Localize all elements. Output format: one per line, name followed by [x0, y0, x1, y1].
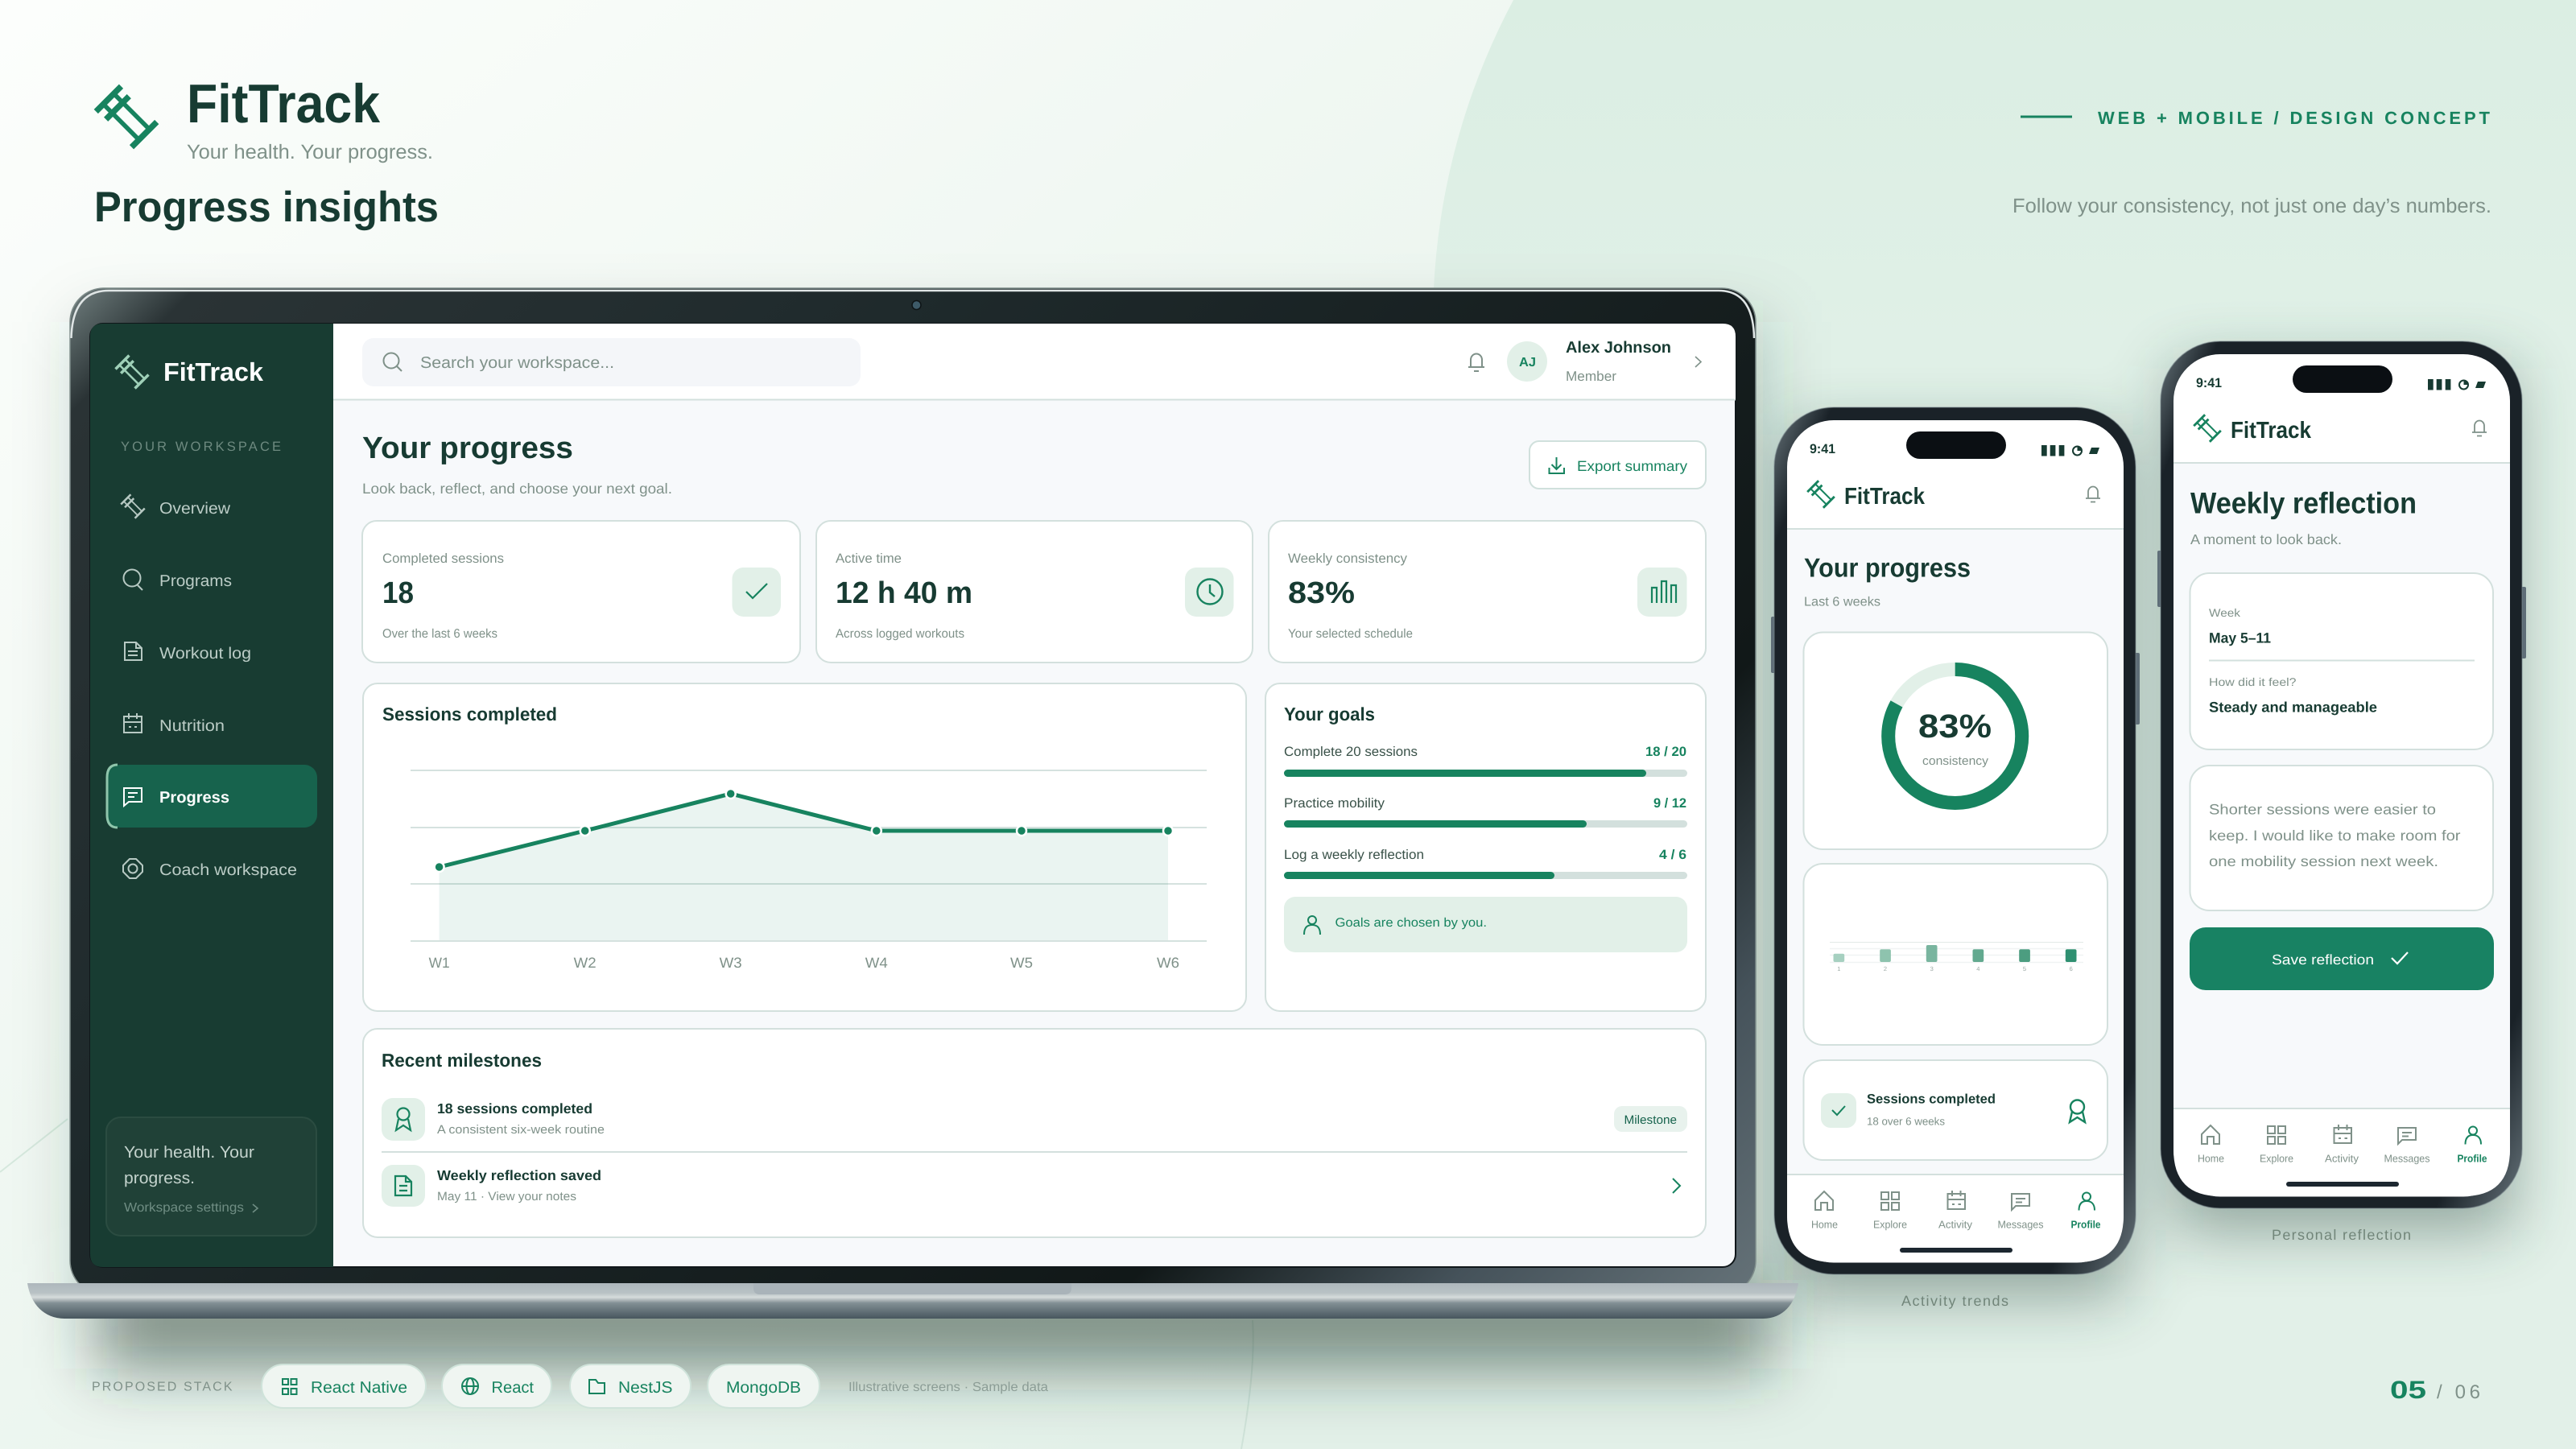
- user profile: Member: [1566, 369, 1616, 384]
- sidebar section label: YOUR WORKSPACE: [121, 440, 281, 454]
- bar chart card: 5: [2023, 965, 2026, 972]
- nav: overview: [121, 494, 231, 518]
- chip: React: React: [491, 1379, 534, 1397]
- goal: practice mobility: [1284, 796, 1687, 828]
- sessions summary card: 18 over 6 weeks: [1867, 1116, 1945, 1127]
- bar chart card: [1803, 864, 2107, 1045]
- reflection note card: Shorter sessions were easier to: [2209, 802, 2436, 818]
- header: concept tag: WEB + MOBILE / DESIGN CONCEPT: [2098, 108, 2491, 128]
- status bar: [2196, 376, 2486, 390]
- goal: weekly reflection: 4 / 6: [1659, 848, 1686, 862]
- KPI card: completed sessions: Over the last 6 weeks: [382, 627, 497, 641]
- milestone: sessions: A consistent six-week routine: [437, 1123, 605, 1137]
- nav: programs: [124, 570, 232, 590]
- x axis labels: [429, 955, 1179, 971]
- chip: MongoDB: [708, 1364, 819, 1408]
- KPI card: weekly consistency: Weekly consistency: [1288, 551, 1408, 566]
- status bar: 9:41: [2196, 376, 2222, 390]
- camera: [912, 301, 921, 309]
- search field: Search your workspace...: [420, 354, 614, 372]
- chart card: sessions completed: [363, 683, 1246, 1011]
- tab: home: Home: [2198, 1153, 2224, 1164]
- status bar: 9:41: [1810, 442, 1835, 456]
- tab: home: [2198, 1125, 2224, 1164]
- nav: workout log: Workout log: [159, 645, 251, 663]
- KPI card: weekly consistency: 83%: [1288, 576, 1355, 610]
- page number: 05: [2390, 1376, 2426, 1404]
- nav: coach workspace: Coach workspace: [159, 861, 297, 879]
- goal: complete sessions: Complete 20 sessions: [1284, 745, 1418, 759]
- tab: home: [1811, 1191, 1838, 1230]
- KPI card: completed sessions: Completed sessions: [382, 551, 504, 566]
- goals card: Your goals: [1284, 704, 1375, 724]
- laptop shadows: [80, 322, 1771, 1368]
- chip: React Native: [262, 1364, 426, 1408]
- tab: activity: [1938, 1191, 1973, 1230]
- sidebar logo: [115, 355, 263, 389]
- reflection note card: one mobility session next week.: [2209, 853, 2438, 869]
- tab: profile active: [2070, 1193, 2101, 1230]
- tab: profile active: Profile: [2457, 1153, 2487, 1164]
- goals card: [1265, 683, 1706, 1011]
- sidebar logo: FitTrack: [163, 357, 263, 386]
- tab: activity: [2325, 1125, 2359, 1164]
- chart title: Sessions completed: [382, 704, 557, 724]
- x axis labels: W4: [865, 955, 888, 971]
- sidebar note card: progress.: [124, 1169, 195, 1187]
- sidebar: [90, 324, 333, 1267]
- goal: practice mobility: Practice mobility: [1284, 796, 1385, 811]
- phone frame: [1771, 407, 2140, 1274]
- main heading: [362, 431, 672, 497]
- laptop lid: [70, 288, 1756, 1294]
- milestone: sessions: 18 sessions completed: [437, 1100, 592, 1117]
- main heading: Look back, reflect, and choose your next goal.: [362, 481, 672, 497]
- chip: NestJS: [570, 1364, 691, 1408]
- app header: FitTrack: [1844, 484, 1926, 510]
- bar chart card: 1: [1837, 965, 1840, 972]
- goal: complete sessions: 18 / 20: [1645, 745, 1686, 759]
- tab: messages: [1998, 1194, 2044, 1230]
- nav: programs: Programs: [159, 572, 232, 590]
- footer: proposed stack: [92, 1364, 1048, 1408]
- page title: Progress insights: [94, 184, 439, 231]
- milestones card: [363, 1029, 1706, 1237]
- tab: messages: [2384, 1128, 2430, 1164]
- goals note: [1284, 897, 1687, 952]
- reflection note card: [2190, 766, 2493, 910]
- icon: FitTrack dumbbell logo: [96, 86, 157, 147]
- consistency ring card: consistency: [1922, 754, 1989, 768]
- bar chart card: 2: [1884, 965, 1887, 972]
- reflection details card: Steady and manageable: [2209, 699, 2377, 715]
- chip: React Native: React Native: [311, 1379, 407, 1397]
- milestone: sessions: Milestone: [1624, 1113, 1677, 1127]
- line chart: [435, 789, 1173, 940]
- header: description: Follow your consistency, not just one day’s numbers.: [2013, 195, 2491, 217]
- bar chart card: 6: [2070, 965, 2073, 972]
- sidebar note card: [106, 1117, 316, 1236]
- sidebar note card: Workspace settings: [124, 1201, 244, 1215]
- tab: explore: [1873, 1192, 1907, 1230]
- reflection details card: [2190, 573, 2493, 749]
- KPI card: weekly consistency: [1269, 521, 1706, 663]
- nav: workout log: [125, 642, 251, 663]
- milestone: reflection: May 11 · View your notes: [437, 1190, 576, 1203]
- sessions summary card: [1803, 1060, 2107, 1160]
- KPI card: active time: [816, 521, 1253, 663]
- phone: activity trends: [1771, 407, 2140, 1274]
- app header: FitTrack: [2231, 418, 2312, 444]
- tab: profile active: [2457, 1127, 2487, 1164]
- save button: Save reflection: [2272, 952, 2374, 968]
- phone heading: A moment to look back.: [2190, 531, 2342, 547]
- nav: nutrition: Nutrition: [159, 717, 225, 735]
- nav: nutrition: [124, 713, 225, 735]
- nav: progress active: Progress: [159, 789, 229, 807]
- goal: weekly reflection: [1284, 848, 1687, 879]
- chip: React: [442, 1364, 551, 1408]
- reflection details card: How did it feel?: [2209, 675, 2297, 688]
- user profile: Alex Johnson: [1566, 339, 1671, 357]
- brand name: FitTrack: [187, 73, 380, 134]
- app header: [2174, 415, 2510, 464]
- status bar: [1810, 442, 2099, 456]
- phone: weekly reflection: [2157, 341, 2526, 1208]
- x axis labels: W2: [574, 955, 597, 971]
- phone heading: [1804, 552, 1971, 609]
- stack label: PROPOSED STACK: [92, 1380, 233, 1394]
- phone heading: Weekly reflection: [2190, 486, 2417, 520]
- caption: activity trends: Activity trends: [1901, 1293, 2008, 1309]
- sidebar note card: Your health. Your: [124, 1143, 254, 1162]
- milestones card: Recent milestones: [382, 1050, 542, 1071]
- background blob: [1433, 0, 2576, 1006]
- header: brand block: [96, 73, 433, 163]
- bar chart card: 3: [1930, 965, 1934, 972]
- nav: overview: Overview: [159, 500, 231, 518]
- reflection note card: keep. I would like to make room for: [2209, 828, 2461, 844]
- tab: activity: Activity: [1938, 1219, 1973, 1230]
- nav: coach workspace: [123, 859, 297, 879]
- nav: progress active: [106, 765, 317, 828]
- phone heading: Your progress: [1804, 552, 1971, 583]
- chip: NestJS: NestJS: [618, 1379, 673, 1397]
- goal: practice mobility: 9 / 12: [1653, 796, 1686, 811]
- search field: [362, 338, 861, 386]
- export button: [1530, 441, 1706, 489]
- page number: / 06: [2437, 1381, 2480, 1403]
- goals note: Goals are chosen by you.: [1335, 916, 1487, 930]
- top bar: [333, 324, 1736, 401]
- laptop: [27, 288, 1798, 1319]
- page number: [2390, 1376, 2480, 1404]
- milestone: sessions: [382, 1098, 1687, 1141]
- app header: [1787, 481, 2124, 530]
- phone heading: Last 6 weeks: [1804, 596, 1880, 609]
- x axis labels: W5: [1010, 955, 1033, 971]
- main heading: Your progress: [362, 431, 573, 465]
- tab: messages: Messages: [1998, 1219, 2044, 1230]
- goal: complete sessions: [1284, 745, 1687, 777]
- chip: MongoDB: MongoDB: [726, 1379, 801, 1397]
- KPI card: completed sessions: [362, 521, 800, 663]
- goal: weekly reflection: Log a weekly reflection: [1284, 848, 1424, 862]
- footnote: Illustrative screens · Sample data: [848, 1381, 1048, 1394]
- laptop screen: [90, 324, 1736, 1267]
- bottom tab bar: [2174, 1108, 2510, 1196]
- export button: Export summary: [1577, 458, 1687, 474]
- phone heading: [2190, 486, 2417, 547]
- user profile: [1507, 339, 1701, 384]
- tab: profile active: Profile: [2070, 1219, 2101, 1230]
- laptop base: [27, 1283, 1798, 1319]
- KPI card: active time: 12 h 40 m: [836, 576, 972, 610]
- bar chart card: 4: [1976, 965, 1979, 972]
- phone shadows: [1787, 369, 2512, 1296]
- phone frame: [2157, 341, 2526, 1208]
- reflection details card: Week: [2209, 606, 2241, 619]
- tab: explore: Explore: [2260, 1153, 2293, 1164]
- bottom tab bar: [1787, 1174, 2124, 1262]
- tagline: Your health. Your progress.: [187, 141, 433, 163]
- tab: home: Home: [1811, 1219, 1838, 1230]
- icon: notification bell: [1468, 354, 1484, 371]
- x axis labels: W3: [720, 955, 742, 971]
- tab: explore: [2260, 1126, 2293, 1164]
- caption: personal reflection: Personal reflection: [2272, 1227, 2411, 1243]
- milestone: reflection: [382, 1165, 1680, 1207]
- sessions summary card: Sessions completed: [1867, 1092, 1996, 1106]
- KPI card: completed sessions: 18: [382, 576, 414, 610]
- x axis labels: W1: [429, 955, 450, 971]
- consistency ring card: 83%: [1918, 708, 1992, 745]
- KPI card: active time: Active time: [836, 551, 902, 566]
- user profile: AJ: [1519, 356, 1536, 369]
- tab: messages: Messages: [2384, 1153, 2430, 1164]
- tab: explore: Explore: [1873, 1219, 1907, 1230]
- x axis labels: W6: [1157, 955, 1179, 971]
- save button: [2190, 927, 2494, 990]
- KPI card: active time: Across logged workouts: [836, 627, 964, 641]
- reflection details card: May 5–11: [2209, 630, 2271, 646]
- KPI card: weekly consistency: Your selected schedule: [1288, 627, 1413, 641]
- milestone: reflection: Weekly reflection saved: [437, 1167, 601, 1183]
- tab: activity: Activity: [2325, 1153, 2359, 1164]
- consistency ring card: [1803, 633, 2107, 849]
